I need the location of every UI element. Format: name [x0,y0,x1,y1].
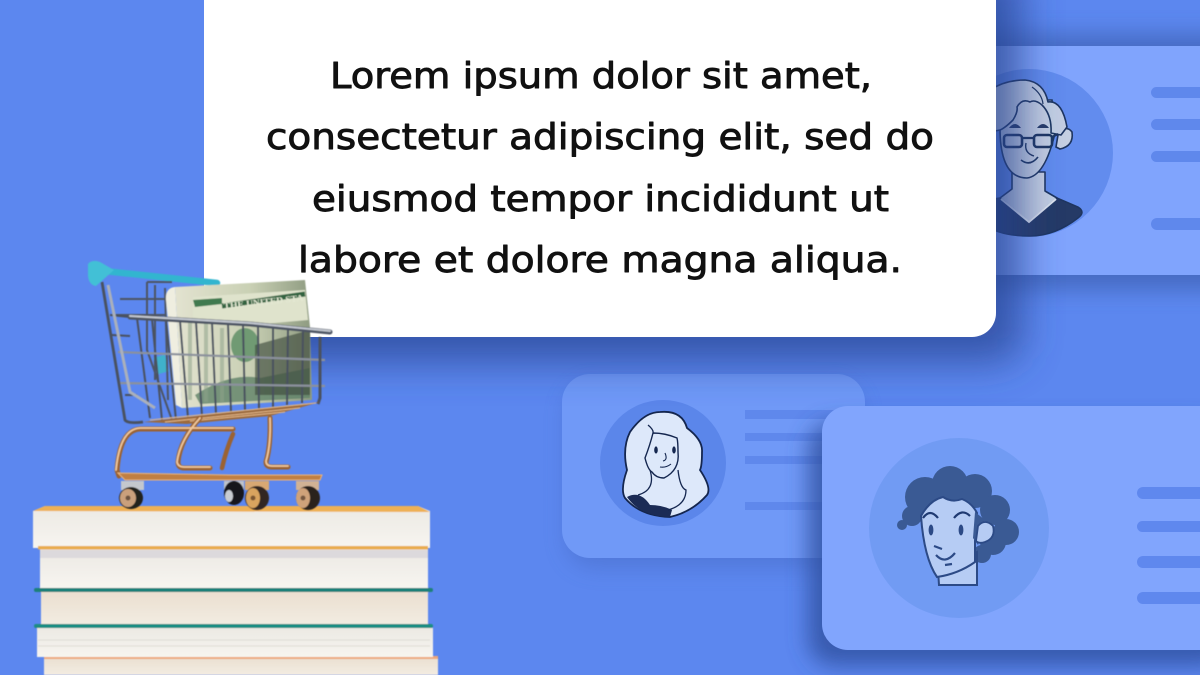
body text [266,56,934,281]
avatar: man with glasses [945,69,1113,237]
banknote text: THE UNITED STA [223,293,304,311]
basket rim [130,317,330,332]
book 4 [37,628,433,657]
book 1 [33,506,430,550]
curly hair [897,466,1019,563]
text lines [1151,87,1200,230]
profile card: middle [562,374,865,568]
body text: eiusmod tempor incididunt ut [312,179,889,220]
profile card: front [808,406,1200,666]
gold basket floor [143,402,320,424]
profile card: top right [940,34,1200,290]
book 5 [44,656,438,675]
body text: Lorem ipsum dolor sit amet, [330,56,872,97]
body text: labore et dolore magna aliqua. [298,240,902,281]
book 3 [34,592,433,628]
text lines [745,410,855,510]
dollar bills [166,280,312,408]
book stack [33,506,438,675]
avatar: woman with wavy hair [600,400,726,526]
basket wires [102,282,325,423]
white text panel [204,0,1022,362]
back wires [112,282,172,420]
avatar: curly hair person [869,438,1049,618]
body text: consectetur adipiscing elit, sed do [266,117,934,158]
cart legs and base [117,418,288,476]
shopping cart with money [88,261,330,510]
book 2 [34,549,433,592]
wheels [119,481,320,510]
text lines [1137,487,1200,604]
teal handle [88,261,217,374]
